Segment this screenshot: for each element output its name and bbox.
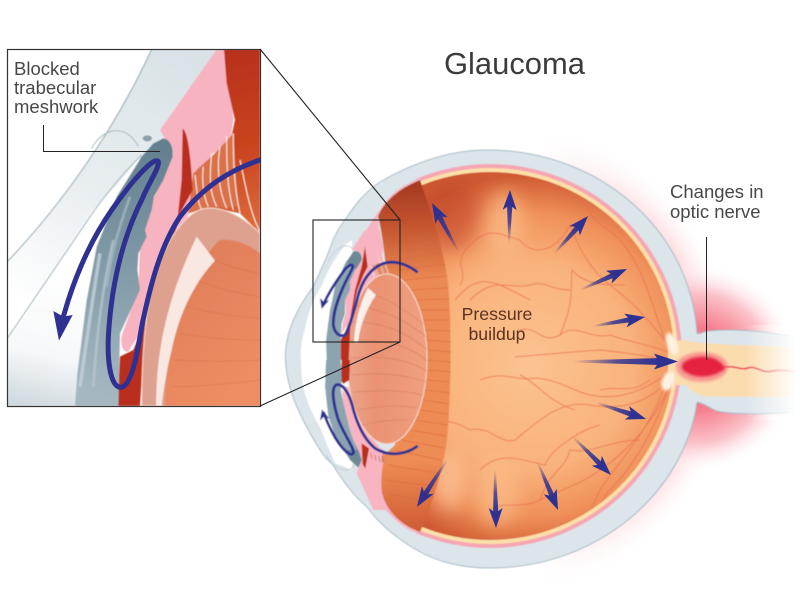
label: blocked trabecular meshwork: [14, 58, 160, 152]
lens: [347, 274, 428, 444]
arrow 4: [578, 263, 630, 296]
fibre region behind lens: [368, 262, 392, 463]
red iris root: [341, 247, 368, 360]
cornea inner edge line: [7, 155, 142, 338]
fundus: [421, 172, 673, 540]
label: changes in optic nerve: optic nerve: [670, 201, 760, 222]
red glow around back of eye: [572, 162, 778, 554]
arrow 10: [488, 470, 503, 528]
label: pressure buildup: buildup: [468, 324, 526, 344]
optic disc: [659, 331, 681, 392]
ciliary muscle band: [378, 180, 451, 532]
iris: [325, 360, 362, 467]
arrow 3: [549, 211, 593, 258]
pink ciliary tissue: [121, 49, 233, 352]
lens: [142, 208, 260, 406]
blue aqueous flow: [63, 160, 260, 387]
red muscle and orange fibres: [192, 49, 260, 233]
arrow 1: [426, 200, 464, 255]
red iris root: [341, 360, 350, 384]
title: Glaucoma: [444, 46, 586, 81]
pink lobe: [342, 230, 383, 334]
lower pink ciliary tissue: [343, 385, 420, 532]
arrow 9: [531, 459, 564, 513]
iris: [75, 138, 173, 406]
Schlemm canal loop: [92, 131, 138, 148]
retinal vessels: [448, 214, 668, 510]
main eye cross-section: [285, 150, 800, 568]
pressure arrows: [411, 190, 678, 528]
arrow 11: [411, 456, 453, 511]
lower anterior structures: [320, 360, 417, 510]
magnification box and connector lines: [260, 49, 400, 406]
zonule fibres: [195, 133, 260, 232]
blue aqueous flow: [324, 262, 417, 336]
blue aqueous flow: [324, 385, 417, 454]
inset: magnified drainage angle: [7, 49, 260, 406]
conjunctiva bumps: [326, 246, 358, 470]
upper pink ciliary tissue: [345, 178, 420, 345]
anterior chamber white: [301, 240, 352, 470]
red iris root: [117, 128, 193, 406]
sclera and cornea: [285, 150, 697, 568]
arrow 5: [592, 310, 646, 333]
fibres: [372, 253, 388, 277]
zonule fibre backing: [188, 133, 238, 213]
cornea band: [24, 50, 216, 267]
pink lobe: [342, 388, 387, 510]
iris: [326, 251, 362, 360]
optic nerve: [668, 325, 800, 420]
upper anterior structures: [320, 230, 417, 360]
label: blocked trabecular meshwork: trabecular: [14, 77, 96, 98]
arrow 7: [594, 396, 648, 426]
label: pressure buildup: Pressure: [462, 304, 533, 324]
label: blocked trabecular meshwork: meshwork: [14, 96, 99, 117]
label: blocked trabecular meshwork: Blocked: [14, 58, 80, 79]
label: changes in optic nerve: [670, 181, 764, 360]
lens highlight: [156, 237, 215, 406]
label: changes in optic nerve: Changes in: [670, 181, 764, 202]
arrow 6: [573, 354, 678, 370]
pink and cream rings: [416, 164, 682, 548]
muscle fibres: [385, 240, 451, 500]
arrow 8: [568, 432, 616, 480]
fibres: [371, 453, 383, 462]
arrow 2: [502, 190, 517, 243]
anterior chamber: [7, 157, 140, 406]
cornea outer edge line: [7, 49, 152, 262]
